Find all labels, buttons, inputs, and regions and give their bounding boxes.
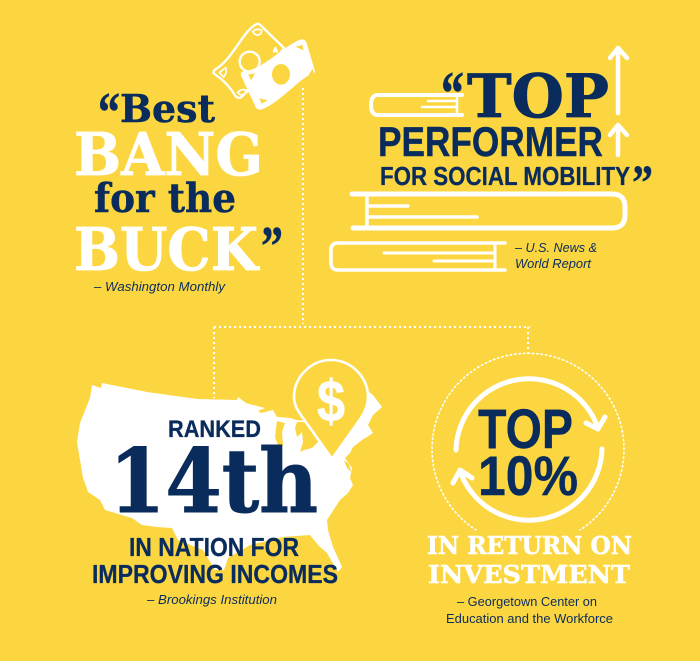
source: Georgetown Center: [446, 594, 613, 626]
opening quote: “: [441, 60, 464, 128]
panel: ranked 14th: [77, 360, 382, 607]
text: investment: INVESTMENT: [428, 560, 630, 589]
source: U.S. News & World Report: – U.S. News &: [514, 241, 597, 255]
text: in return on: IN RETURN ON: [427, 531, 632, 560]
heading: for social mobility: FOR SOCIAL MOBILITY: [380, 161, 630, 191]
text: TOP: TOP: [478, 397, 573, 460]
closing quote: ”: [632, 154, 653, 210]
text: 10%: 10%: [478, 444, 578, 507]
closing quote: ”: [261, 216, 283, 278]
panel: top performer: [331, 48, 653, 271]
heading: TOP: TOP: [467, 62, 609, 132]
icon: map pin with dollar sign: [294, 360, 368, 458]
heading: BANG: BANG: [74, 120, 263, 189]
dotted ring: [432, 353, 624, 530]
icon: map pin with dollar sign: $: [317, 369, 345, 434]
icon: circular arrows: [453, 379, 605, 520]
heading: for the: for the: [94, 175, 236, 222]
source: Brookings Institution: – Brookings Institution: [146, 592, 277, 607]
source: Washington Monthly: – Washington Monthly: [93, 279, 227, 294]
icon: stack of books: [331, 95, 625, 270]
heading: Best: Best: [120, 87, 215, 132]
panel: best bang for the buck: [74, 24, 315, 294]
text: ranked: RANKED: [168, 416, 261, 443]
text: improving incomes: IMPROVING INCOMES: [92, 559, 338, 589]
opening quote: “: [98, 82, 120, 144]
map of United States: [77, 370, 382, 572]
big number: 14th: 14th: [109, 429, 318, 533]
heading: BUCK: BUCK: [74, 215, 261, 284]
icon: up arrows: [610, 48, 627, 155]
source: Georgetown Center: Education and the Workforce: [446, 611, 613, 626]
source: Georgetown Center: – Georgetown Center on: [457, 594, 597, 609]
source: U.S. News & World Report: [514, 241, 597, 271]
panel: top 10%: [427, 353, 632, 626]
text: in nation for: IN NATION FOR: [129, 532, 299, 562]
icon: money bills: [213, 24, 315, 110]
source: U.S. News & World Report: World Report: [515, 257, 592, 271]
heading: PERFORMER: PERFORMER: [378, 118, 603, 165]
